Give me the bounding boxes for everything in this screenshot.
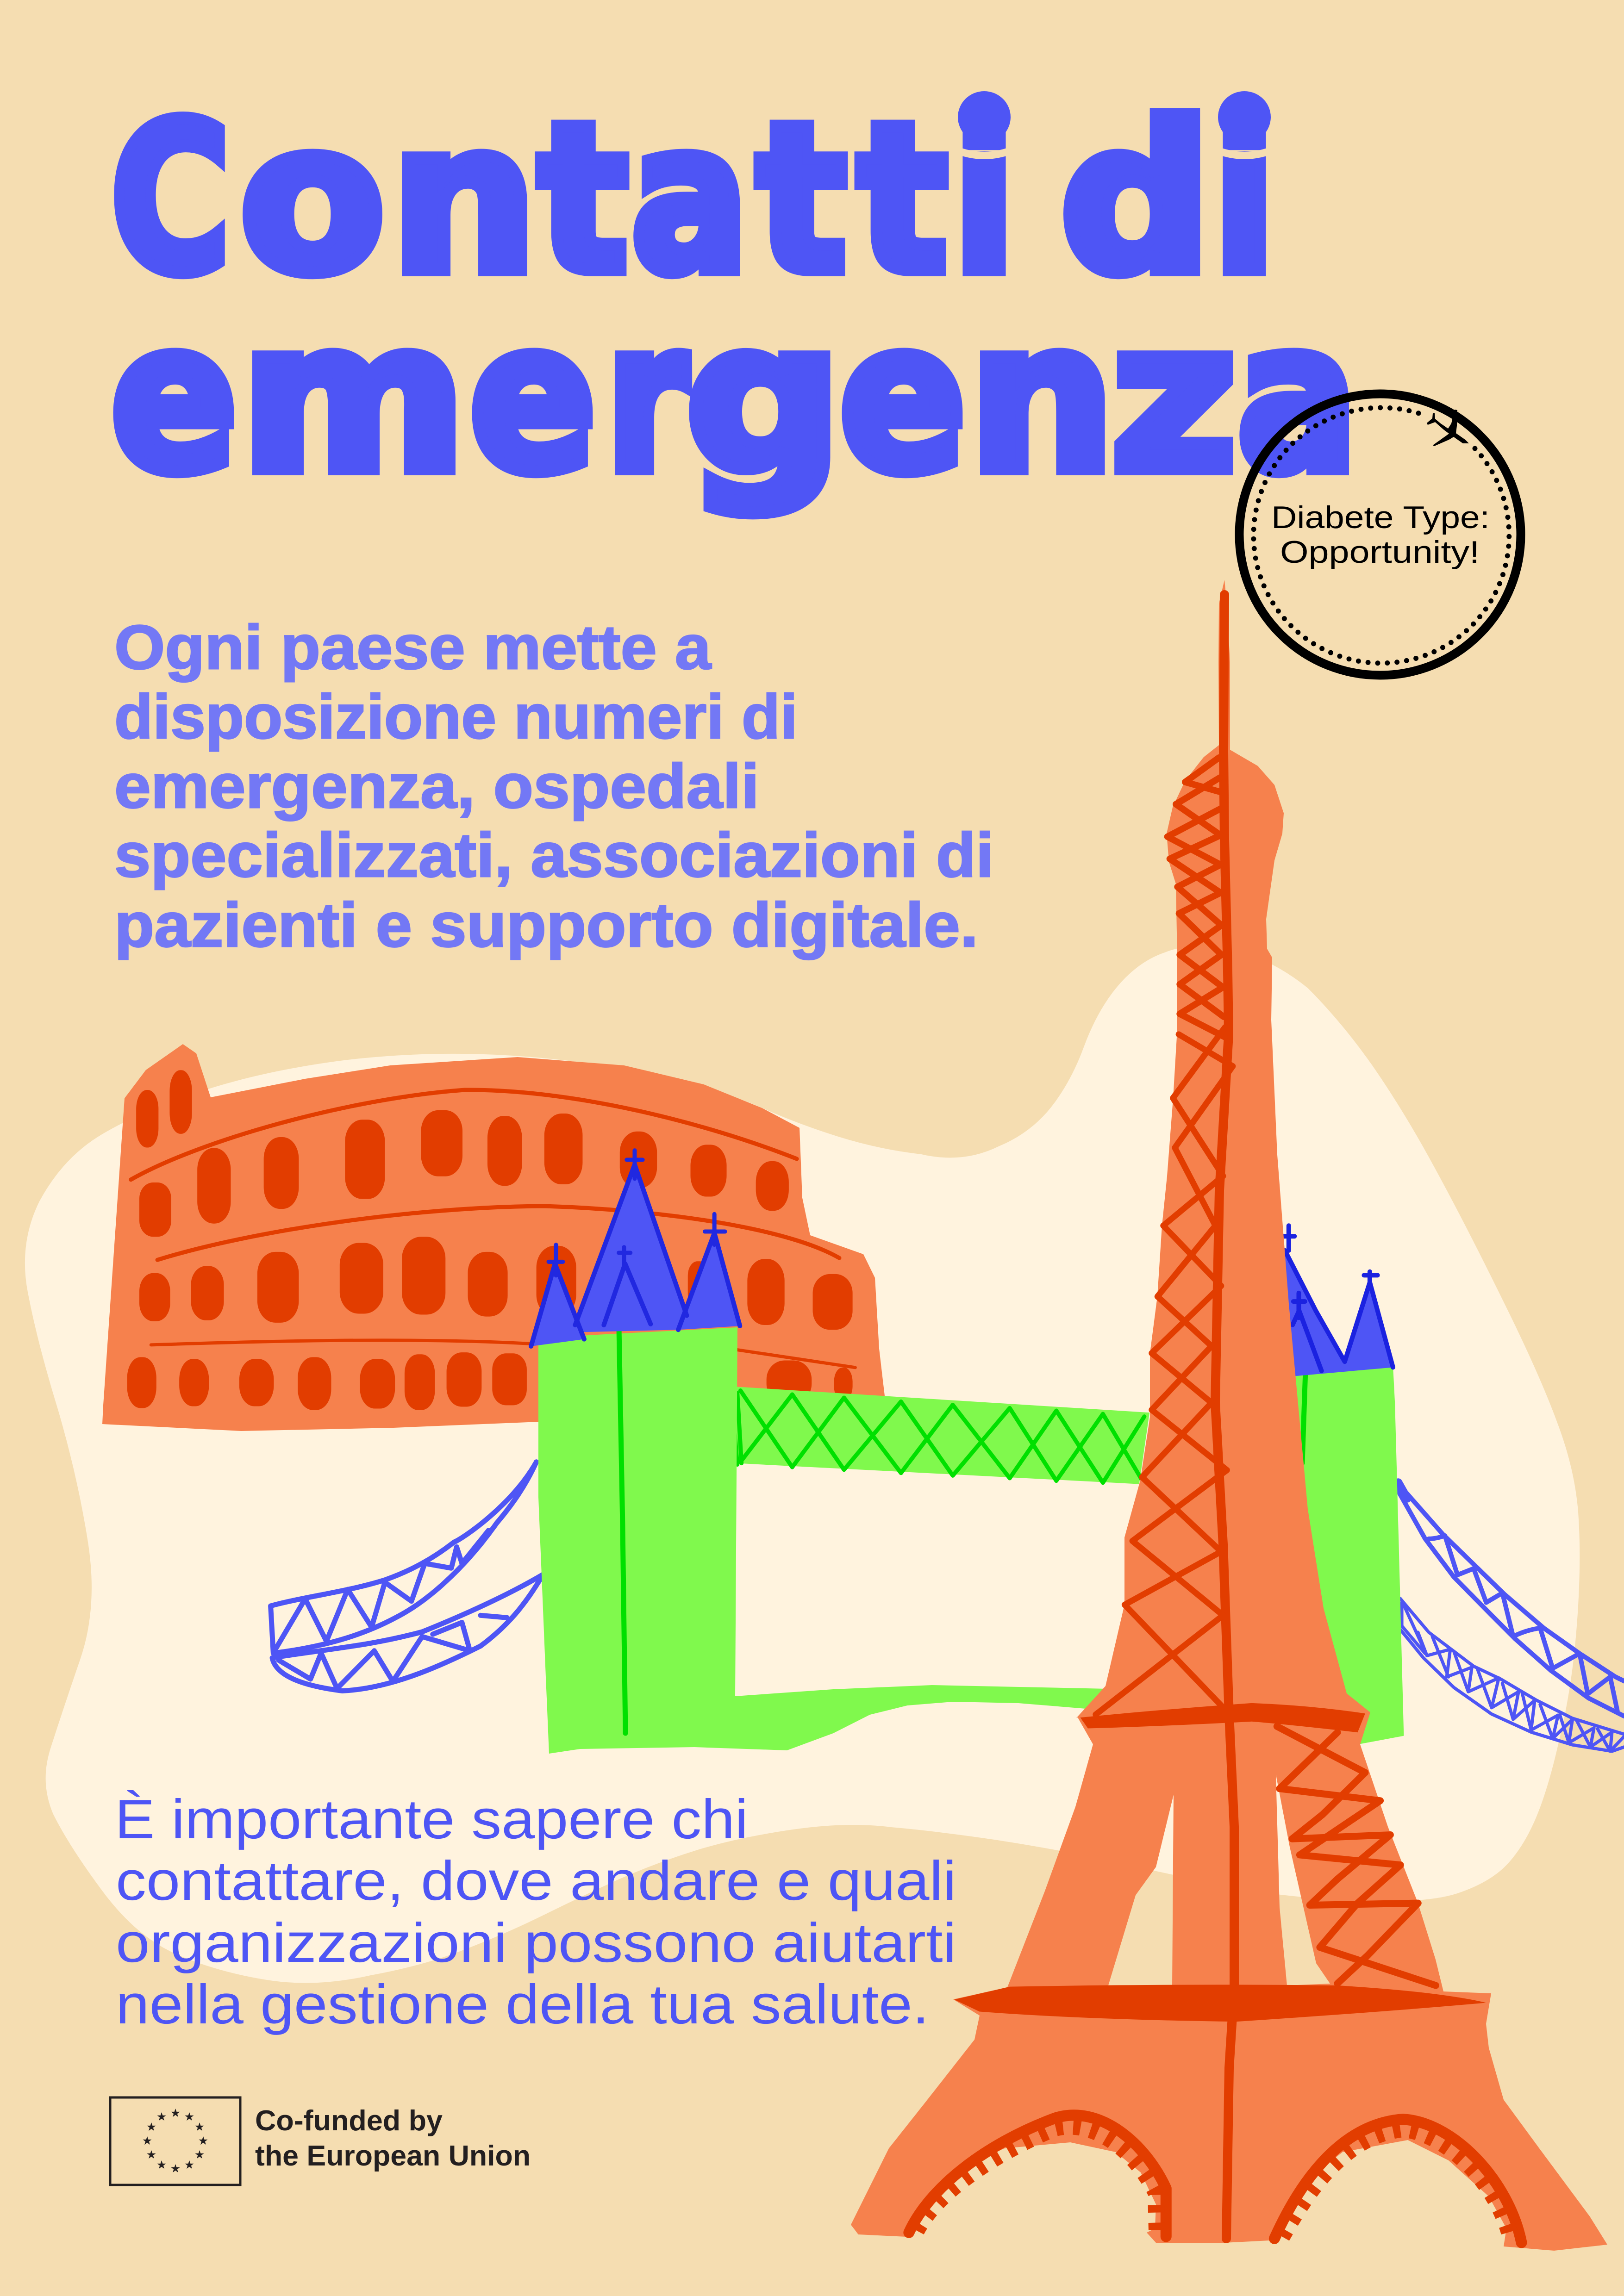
title bbox=[111, 81, 1357, 517]
title line 1: t bbox=[858, 81, 947, 318]
bands, leg lattice and arches bbox=[909, 1703, 1521, 2243]
illustration: Colosseum bbox=[102, 1044, 885, 1431]
title line 2: m bbox=[241, 280, 466, 517]
paragraph: intro: specializzati, associazioni di bbox=[114, 820, 994, 890]
logo: Co-funded by the European Union bbox=[110, 2097, 531, 2185]
icon: airplane bbox=[1427, 410, 1469, 446]
funding text: the European Union bbox=[255, 2140, 531, 2172]
title line 1: n bbox=[391, 81, 537, 318]
paragraph: advice: organizzazioni possono aiutarti bbox=[116, 1912, 956, 1974]
title line 1: t bbox=[538, 81, 628, 318]
title line 2: e bbox=[840, 280, 966, 517]
left suspension trusses bbox=[271, 1462, 543, 1691]
title line 2: r bbox=[606, 280, 688, 517]
right tower bbox=[1250, 1226, 1404, 1744]
paragraph: advice: contattare, dove andare e quali bbox=[116, 1850, 956, 1912]
paragraph: intro bbox=[114, 612, 994, 960]
funding text: Co-funded by bbox=[255, 2105, 443, 2137]
tower body bbox=[851, 580, 1607, 2251]
EU flag outline and stars bbox=[110, 2097, 240, 2185]
badge text bbox=[1271, 500, 1490, 570]
title line 2: n bbox=[969, 280, 1114, 517]
badge: Diabete Type Opportunity bbox=[1239, 394, 1521, 675]
title line 2: a bbox=[1237, 280, 1357, 517]
paragraph: advice: È importante sapere chi bbox=[115, 1788, 748, 1850]
right suspension trusses bbox=[1396, 1482, 1624, 1751]
title line 2: g bbox=[686, 280, 842, 517]
badge text: Opportunity! bbox=[1280, 535, 1480, 570]
left tower spires bbox=[531, 1151, 740, 1346]
title line 1: d bbox=[1061, 81, 1211, 318]
background cream blob bbox=[25, 946, 1580, 1983]
title line 1: a bbox=[631, 81, 748, 318]
title line 2: e bbox=[111, 280, 237, 517]
illustration: Tower Bridge bbox=[271, 1151, 1624, 1754]
upper walkway bbox=[731, 1387, 1149, 1484]
paragraph: advice: nella gestione della tua salute. bbox=[116, 1973, 929, 2035]
left tower green line bbox=[619, 1329, 625, 1733]
title line 1: i bbox=[953, 81, 1015, 318]
title line 1: o bbox=[240, 81, 385, 318]
left tower and lower walkway bbox=[538, 1327, 1108, 1754]
central mast line bbox=[1215, 595, 1234, 2239]
title i dots bbox=[954, 91, 1275, 156]
illustration: Eiffel Tower bbox=[851, 580, 1607, 2251]
paragraph: intro: pazienti e supporto digitale. bbox=[114, 890, 978, 960]
paragraph: advice bbox=[115, 1788, 956, 2035]
colosseum windows and arcs bbox=[127, 1070, 855, 1410]
upper lattice bbox=[1096, 1027, 1233, 1715]
title line 1: C bbox=[111, 81, 230, 318]
title line 1: t bbox=[757, 81, 846, 318]
title line 2: z bbox=[1112, 280, 1237, 517]
title line 2: e bbox=[470, 280, 596, 517]
funding text bbox=[255, 2105, 531, 2172]
head lattice bbox=[1168, 758, 1224, 1037]
colosseum body bbox=[102, 1044, 885, 1431]
badge text: Diabete Type: bbox=[1271, 500, 1490, 535]
paragraph: intro: Ogni paese mette a bbox=[114, 612, 712, 682]
paragraph: intro: disposizione numeri di bbox=[114, 682, 798, 752]
paragraph: intro: emergenza, ospedali bbox=[114, 751, 759, 821]
title line 1: i bbox=[1213, 81, 1275, 318]
